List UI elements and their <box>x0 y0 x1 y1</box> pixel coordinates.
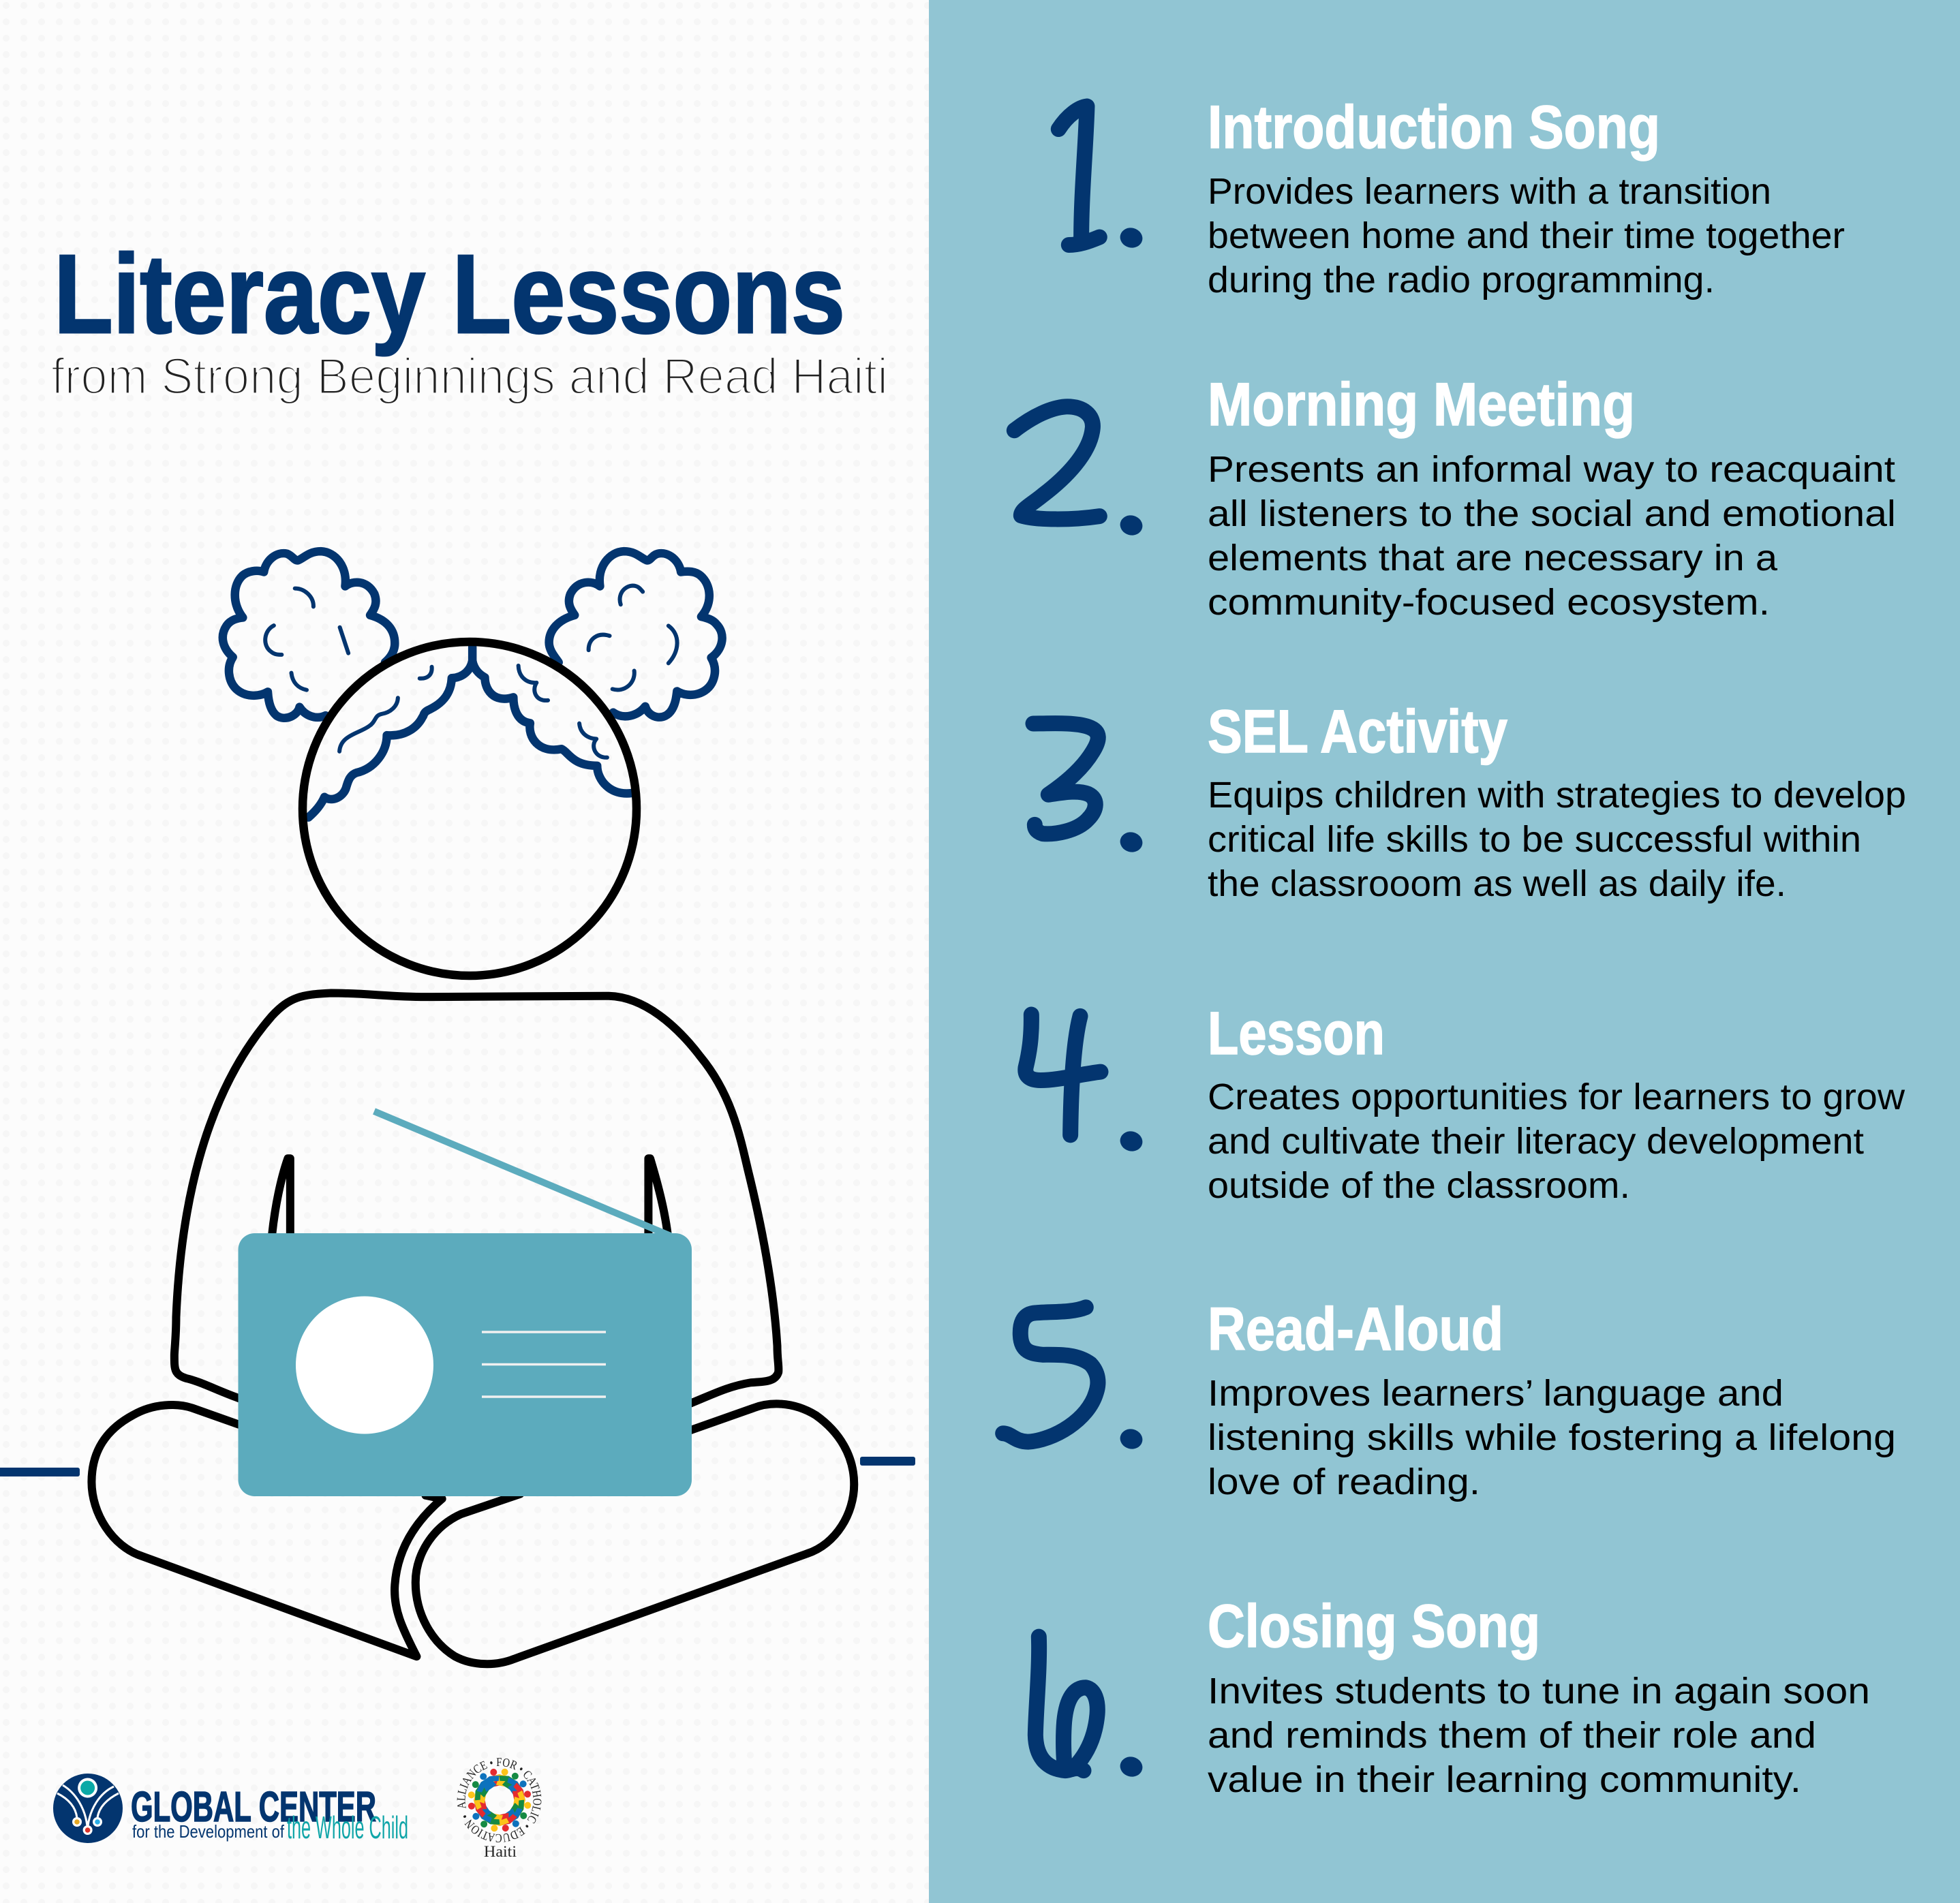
body text: Equips children with strategies to develop <box>1208 775 1906 816</box>
radio speaker <box>296 1296 433 1434</box>
body text: all listeners to the social and emotional <box>1208 494 1896 534</box>
dot <box>1118 1129 1145 1154</box>
body text: Creates opportunities for learners to grow <box>1208 1077 1905 1117</box>
logo: Alliance for Catholic Education Haiti <box>457 1758 541 1860</box>
step 2 <box>1014 370 1896 623</box>
radio body <box>239 1233 692 1496</box>
body text <box>1208 775 1906 904</box>
body text: during the radio programming. <box>1208 260 1715 300</box>
body text: and reminds them of their role and <box>1208 1716 1816 1756</box>
Haiti label: Haiti <box>484 1843 517 1860</box>
body text: and cultivate their literacy development <box>1208 1121 1864 1162</box>
antenna <box>374 1111 671 1236</box>
body text: elements that are necessary in a <box>1208 538 1777 578</box>
body text <box>1208 450 1896 623</box>
title: Literacy Lessons <box>54 232 845 356</box>
body text: community-focused ecosystem. <box>1208 583 1770 623</box>
step 4 <box>1026 999 1905 1206</box>
step 5 <box>1003 1295 1896 1502</box>
body text: Improves learners’ language and <box>1208 1374 1783 1414</box>
subtitle: from Strong Beginnings and Read Haiti <box>51 347 888 405</box>
dot <box>1118 1427 1145 1451</box>
heading: Closing Song <box>1208 1592 1540 1660</box>
number 3 <box>1033 724 1098 834</box>
body and legs <box>91 993 854 1664</box>
body text <box>1208 1374 1896 1502</box>
head outline <box>303 642 637 976</box>
illustration: child with radio <box>0 551 915 1664</box>
logo script: the Whole Child <box>287 1810 408 1845</box>
dot <box>1118 1754 1145 1779</box>
ring text: ALLIANCE • FOR • CATHOLIC • EDUCATION • <box>457 1758 541 1842</box>
number 4 <box>1026 1015 1101 1135</box>
dot <box>1118 513 1145 538</box>
step 1 <box>1058 93 1845 300</box>
panel: right background <box>929 0 1960 1903</box>
ring of figures <box>465 1766 534 1834</box>
heading: Lesson <box>1208 999 1385 1067</box>
panel: left background <box>0 0 929 1903</box>
radio <box>239 1111 692 1496</box>
front hair <box>309 647 632 818</box>
number 5 <box>1003 1308 1098 1442</box>
body text <box>1208 172 1845 300</box>
logo emblem <box>53 1774 123 1843</box>
dot <box>1118 226 1145 250</box>
body text: critical life skills to be successful within <box>1208 820 1861 860</box>
body text: listening skills while fostering a lifelong <box>1208 1418 1896 1458</box>
side dash right <box>860 1457 915 1466</box>
logo wordmark: GLOBAL CENTER <box>131 1784 376 1831</box>
head fill <box>303 642 637 976</box>
body text: between home and their time together <box>1208 216 1845 256</box>
body text: Provides learners with a transition <box>1208 172 1771 212</box>
radio dial lines <box>482 1332 606 1397</box>
body text: Presents an informal way to reacquaint <box>1208 450 1895 490</box>
number 1 <box>1058 106 1099 245</box>
number 6 <box>1035 1637 1097 1771</box>
heading: Morning Meeting <box>1208 370 1635 438</box>
body text: Invites students to tune in again soon <box>1208 1671 1870 1712</box>
body text <box>1208 1077 1905 1206</box>
side dash left <box>0 1468 80 1476</box>
step 6 <box>1035 1592 1870 1800</box>
body text: value in their learning community. <box>1208 1760 1801 1800</box>
heading: SEL Activity <box>1208 697 1507 765</box>
body text: love of reading. <box>1208 1462 1480 1502</box>
heading: Introduction Song <box>1208 93 1660 161</box>
logo: Global Center <box>53 1774 408 1845</box>
number 2 <box>1014 407 1099 519</box>
body text: outside of the classroom. <box>1208 1166 1630 1206</box>
body text <box>1208 1671 1870 1800</box>
step 3 <box>1033 697 1906 904</box>
heading: Read-Aloud <box>1208 1295 1503 1363</box>
logo tagline: for the Development of <box>132 1821 285 1842</box>
dot <box>1118 830 1145 854</box>
body text: the classrooom as well as daily ife. <box>1208 864 1786 904</box>
hair puffs <box>223 551 722 718</box>
